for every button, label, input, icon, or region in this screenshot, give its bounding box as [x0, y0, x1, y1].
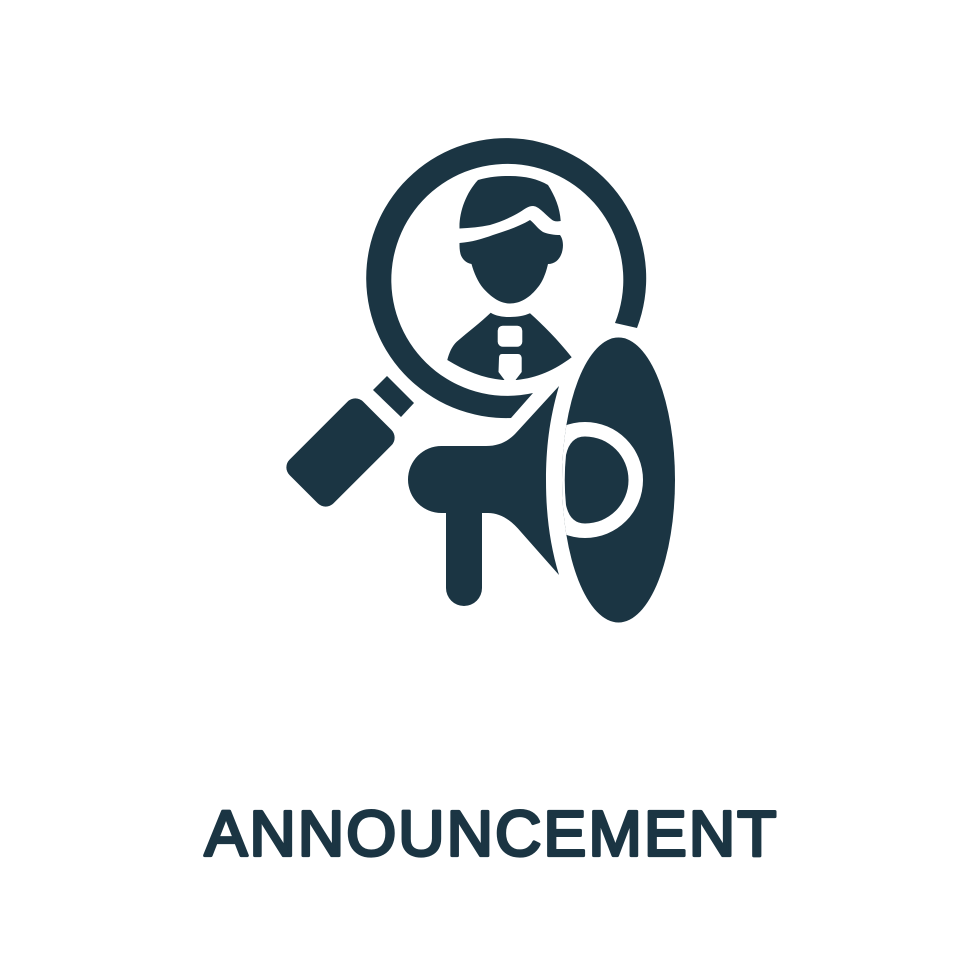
tie blade — [498, 354, 522, 388]
person hair — [459, 176, 561, 228]
person face — [460, 220, 563, 304]
person shoulders — [447, 313, 572, 380]
icon: person — [447, 176, 572, 388]
icon: magnifier collar — [373, 376, 414, 417]
icon: magnifier handle — [282, 394, 399, 511]
tie knot — [498, 326, 522, 347]
infographic canvas — [203, 138, 777, 858]
icon: magnifier ring — [366, 138, 646, 418]
icon: megaphone bell — [562, 338, 675, 622]
icon: magnifying glass with person and megaphone — [282, 138, 675, 623]
title: ANNOUNCEMENT — [205, 797, 779, 869]
icon: megaphone — [408, 386, 559, 606]
bell inner dome — [565, 436, 628, 524]
